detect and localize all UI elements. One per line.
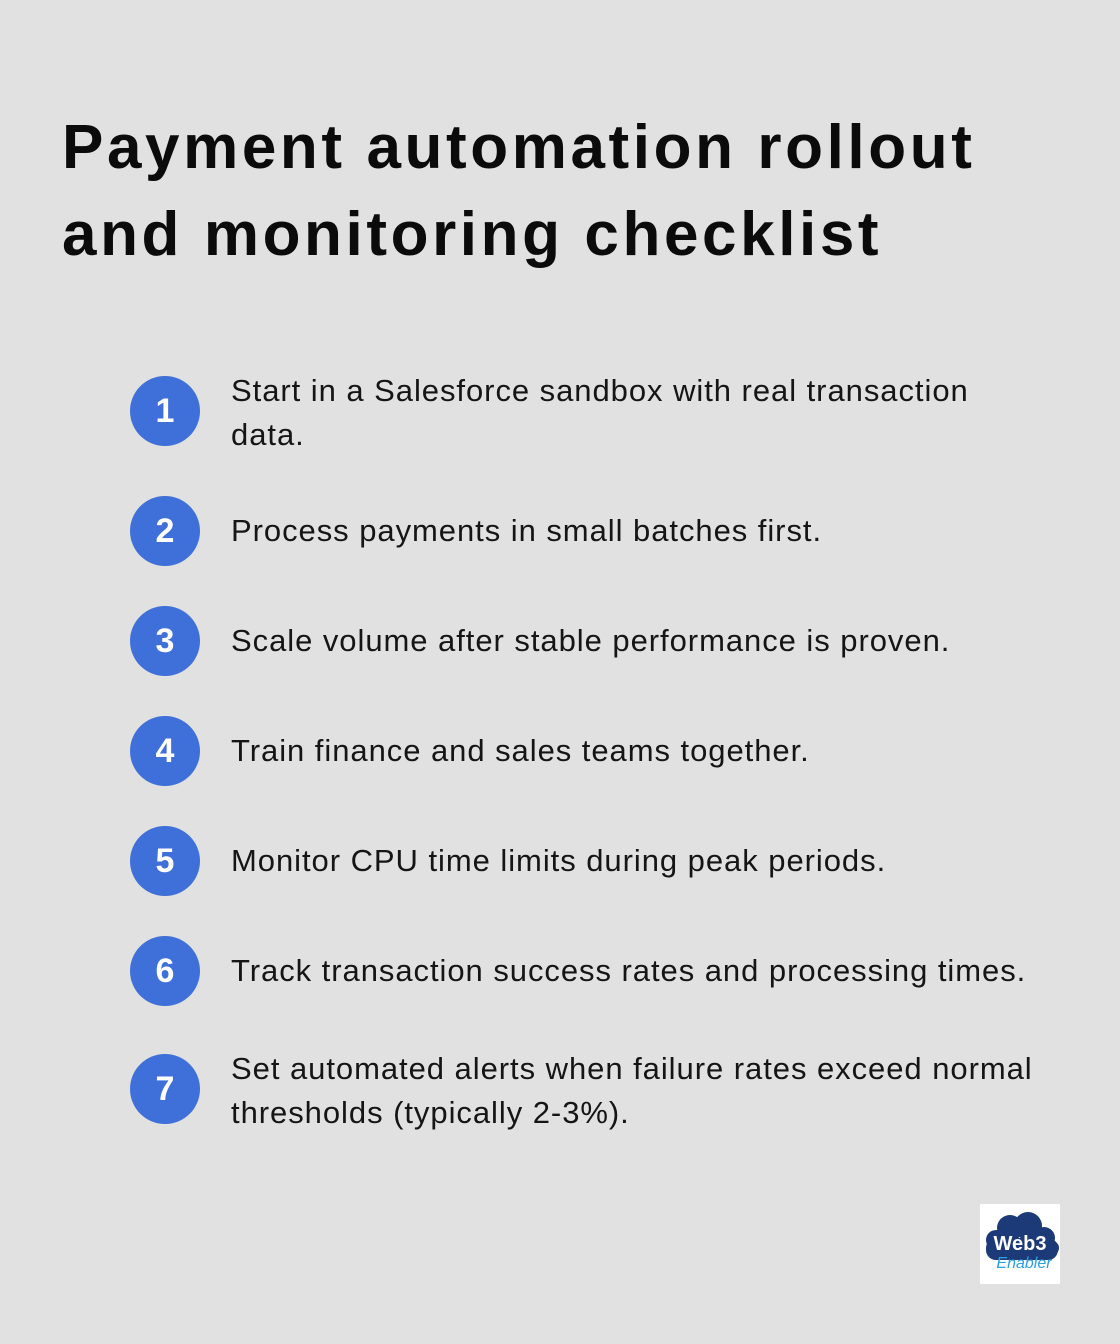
item 1: Start in a Salesforce sandbox with real transaction [231,373,969,408]
item 2: 2 [156,512,174,550]
item 1: data. [231,417,305,452]
title [62,113,975,269]
item 6: 6 [156,952,174,990]
item 4 [130,716,810,786]
item 7: 7 [156,1070,174,1108]
item 6 [130,936,1026,1006]
item 3: Scale volume after stable performance is proven. [231,623,950,658]
item 3: 3 [156,622,174,660]
item 7: Set automated alerts when failure rates exceed normal [231,1051,1033,1086]
item 6: Track transaction success rates and processing times. [231,953,1026,988]
logo: Enabler [996,1255,1052,1272]
item 1 [130,373,969,452]
item 2 [130,496,822,566]
item 5: 5 [156,842,174,880]
item 7: thresholds (typically 2-3%). [231,1095,630,1130]
item 4: Train finance and sales teams together. [231,733,810,768]
item 1: 1 [156,392,174,430]
item 3 [130,606,950,676]
title: Payment automation rollout [62,113,975,182]
item 2: Process payments in small batches first. [231,513,822,548]
logo [980,1204,1060,1284]
item 5 [130,826,886,896]
item 7 [130,1051,1033,1130]
item 4: 4 [156,732,174,770]
title: and monitoring checklist [62,200,882,269]
item 5: Monitor CPU time limits during peak periods. [231,843,886,878]
logo: Web3 [994,1233,1046,1255]
